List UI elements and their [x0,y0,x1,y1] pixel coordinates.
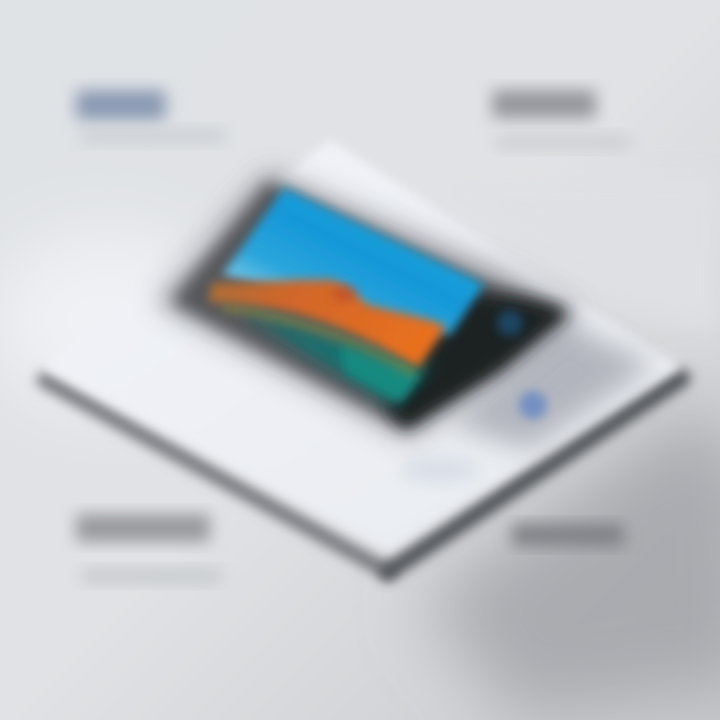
phone body shadow halo [155,172,580,440]
platform top surface [44,140,680,552]
callout heading [492,90,596,118]
platform shaded right side [450,320,655,450]
callout body [496,134,631,150]
screen teal ground [240,310,430,405]
background left glow [0,230,230,410]
platform shadow [420,400,720,720]
platform left edge [44,380,388,572]
panel: phone device [155,172,580,440]
screen mountain dark peak [333,286,357,302]
screen orange mountain [208,280,446,368]
callout: top right [492,90,631,150]
callout: bottom right [512,524,624,546]
platform right edge [388,378,682,572]
phone body [172,182,565,425]
callout: top left [76,90,225,144]
platform pale blue patches [400,456,480,484]
phone dark right corner [385,292,570,430]
panel: tilted platform [44,140,720,572]
phone blue reflection [497,310,523,336]
phone screen [208,188,484,405]
icon: blue dot [519,391,547,419]
callout body [82,568,222,584]
platform top fade [420,170,720,340]
screen olive band [222,308,414,374]
callout body [80,128,225,144]
screen sky [222,188,484,335]
callout heading [512,524,624,546]
callout heading [76,90,166,120]
callout heading [76,514,210,542]
callout: bottom left [76,514,222,584]
